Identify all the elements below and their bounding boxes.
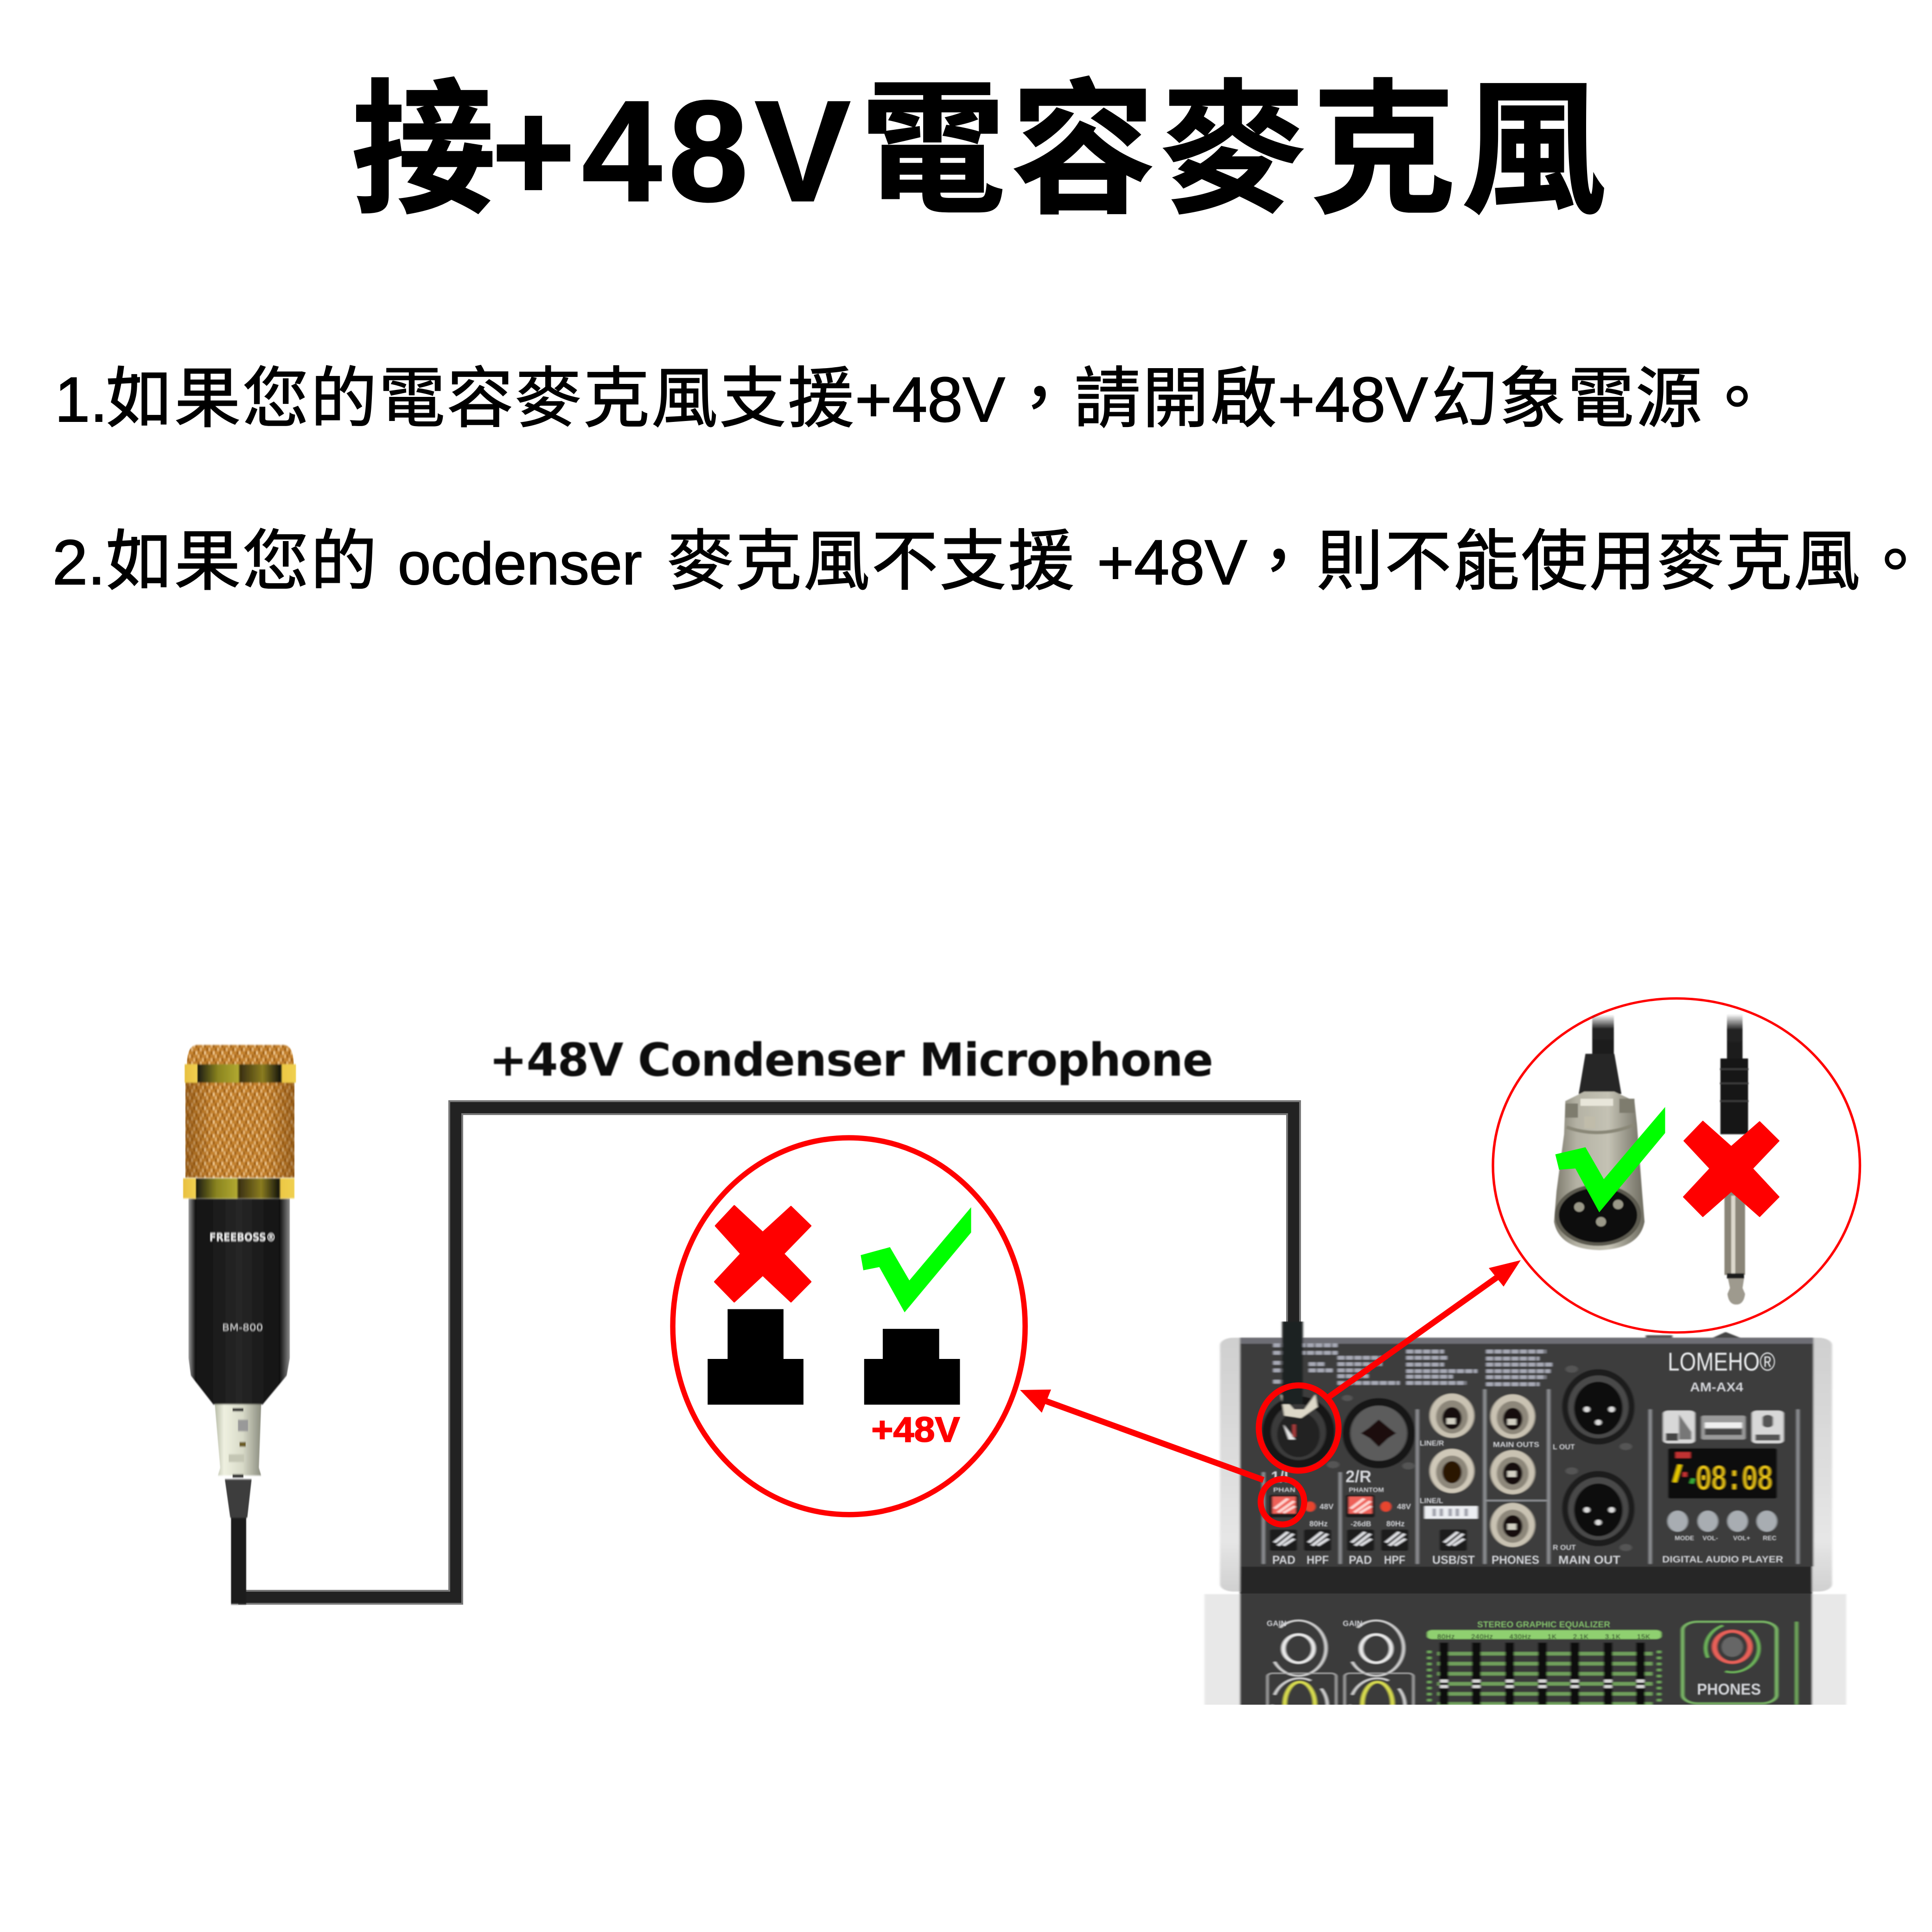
switch not pressed: [708, 1309, 803, 1405]
mixer labels: PHANTOM: [1349, 1486, 1384, 1493]
phantom power buttons: [1269, 1495, 1391, 1518]
mixer labels: PHAN: [1273, 1486, 1295, 1493]
mixer labels: PHONES: [1492, 1554, 1539, 1567]
microphone connector shading: [229, 1408, 248, 1478]
icon: red cross: [1683, 1121, 1779, 1217]
text line 2: +48V: [1097, 527, 1247, 598]
mixer labels: GAIN: [1343, 1619, 1362, 1628]
mixer labels: VOL+: [1733, 1534, 1750, 1542]
mixer labels: PAD: [1349, 1554, 1372, 1567]
mixer labels: GAIN: [1267, 1619, 1286, 1628]
text line 1: +48V: [855, 364, 1005, 435]
callout: phantom power switch positions: [673, 1138, 1025, 1515]
mixer grey side shell: [1205, 1332, 1846, 1707]
mixer labels: MAIN OUT: [1558, 1554, 1620, 1567]
mixer labels: 80Hz: [1386, 1519, 1405, 1528]
callout circle: [1493, 998, 1860, 1333]
cable plug: [1282, 1321, 1303, 1404]
red ellipse on phantom switch: [1261, 1479, 1304, 1524]
+48V label: +48V: [871, 1410, 960, 1449]
mixer labels: 48V: [1320, 1502, 1334, 1511]
mixer labels: LOMEHO®: [1668, 1347, 1775, 1376]
title: 電容麥克風: [861, 70, 1612, 232]
mixer labels: [1267, 1347, 1784, 1698]
mixer labels: -26dB: [1351, 1520, 1371, 1528]
arrow to switch callout: [1020, 1390, 1263, 1480]
text line 2: ocdenser: [398, 531, 642, 597]
gain knobs: [1271, 1620, 1403, 1676]
EQ section: [1427, 1630, 1661, 1705]
text line 2: 如果您的: [106, 525, 379, 599]
mixer lower panel: [1240, 1594, 1812, 1707]
mixer labels: 80Hz 240Hz 430Hz 1K 2.1K 3.1K 15K: [1437, 1633, 1650, 1641]
mixer dark band: [1240, 1567, 1812, 1594]
XLR connector barrel: [215, 1404, 261, 1475]
mixer labels: LINE/R: [1420, 1440, 1444, 1447]
callout circle: [673, 1138, 1025, 1515]
microphone mesh head: [185, 1045, 294, 1178]
text line 2: 2.: [52, 527, 105, 598]
mixer labels: MAIN OUTS: [1493, 1441, 1539, 1449]
mixer labels: PHONES: [1697, 1681, 1761, 1698]
mixer labels: DIGITAL AUDIO PLAYER: [1662, 1555, 1784, 1565]
microphone body: [189, 1199, 290, 1404]
text line 1: +48V: [1278, 364, 1428, 435]
ST IN label: [1424, 1506, 1478, 1519]
mixer labels: R OUT: [1553, 1544, 1576, 1552]
text line 2: 麥克風不支援: [667, 525, 1076, 599]
text line 2: ，: [1245, 525, 1314, 599]
mixer labels: AM-AX4: [1690, 1380, 1743, 1394]
callout: connector types: [1493, 998, 1860, 1333]
mixer labels: HPF: [1307, 1554, 1329, 1567]
icon: green check: [1555, 1107, 1665, 1212]
text line 2: 則不能使用麥克風。: [1317, 525, 1930, 599]
HI knobs: [1268, 1673, 1413, 1734]
arrow to connector callout: [1329, 1260, 1521, 1397]
mixer labels: PAD: [1272, 1554, 1295, 1567]
mixer labels: VOL-: [1702, 1534, 1718, 1542]
icon: green check: [861, 1207, 971, 1312]
mixer labels: LINE/L: [1420, 1497, 1443, 1505]
mixer labels: STEREO GRAPHIC EQUALIZER: [1477, 1620, 1610, 1629]
microphone model: BM-800: [222, 1322, 263, 1333]
mixer section dividers: [1263, 1389, 1798, 1564]
main out XLR connectors: [1562, 1365, 1635, 1551]
USB and function icons: [1663, 1410, 1784, 1443]
mixer: [1205, 1321, 1846, 1734]
text line 1: 如果您的電容麥克風支援: [106, 362, 856, 436]
mixer labels: 1/L: [1271, 1468, 1294, 1486]
line and main output jacks: [1430, 1394, 1535, 1547]
cable label: +48V Condenser Microphone: [489, 1034, 1213, 1087]
microphone brand: FREEBOSS®: [210, 1232, 276, 1244]
XLR plug photo: [1554, 1015, 1645, 1250]
pad and hpf buttons: [1269, 1530, 1467, 1551]
mixer printed legend blocks: [1273, 1345, 1553, 1384]
channel 1 socket with plug: [1262, 1394, 1335, 1468]
digital display: [1668, 1448, 1777, 1500]
red ellipse on mic input: [1259, 1385, 1339, 1471]
cable from microphone to mixer: [238, 1108, 1294, 1597]
text line 1: ，請開啟: [1006, 362, 1279, 436]
mixer labels: 80Hz: [1309, 1519, 1328, 1528]
microphone gold rings: [183, 1064, 296, 1199]
mixer labels: 48V: [1397, 1502, 1411, 1511]
title: 接: [351, 70, 496, 232]
player buttons: [1668, 1511, 1777, 1532]
mixer labels: USB/ST: [1432, 1554, 1475, 1567]
microphone cable end: [231, 1514, 246, 1604]
mixer labels: L OUT: [1553, 1443, 1575, 1451]
digital display: 08:08: [1696, 1461, 1773, 1500]
microphone: [183, 1045, 296, 1604]
phones volume box: [1683, 1622, 1797, 1705]
mono jack plug photo: [1720, 1014, 1748, 1305]
icon: red cross: [715, 1206, 810, 1302]
mixer upper panel: [1240, 1338, 1813, 1567]
mixer labels: HPF: [1384, 1554, 1405, 1567]
text line 1: 幻象電源。: [1431, 362, 1772, 436]
title: +48V: [491, 70, 857, 231]
mixer labels: MODE: [1675, 1534, 1694, 1542]
mixer labels: REC: [1763, 1534, 1777, 1542]
switch pressed: [864, 1329, 960, 1405]
microphone boot: [225, 1479, 252, 1518]
channel 2 combo socket: [1327, 1395, 1415, 1469]
text line 1: 1.: [55, 364, 108, 435]
mixer labels: 2/R: [1345, 1467, 1371, 1486]
